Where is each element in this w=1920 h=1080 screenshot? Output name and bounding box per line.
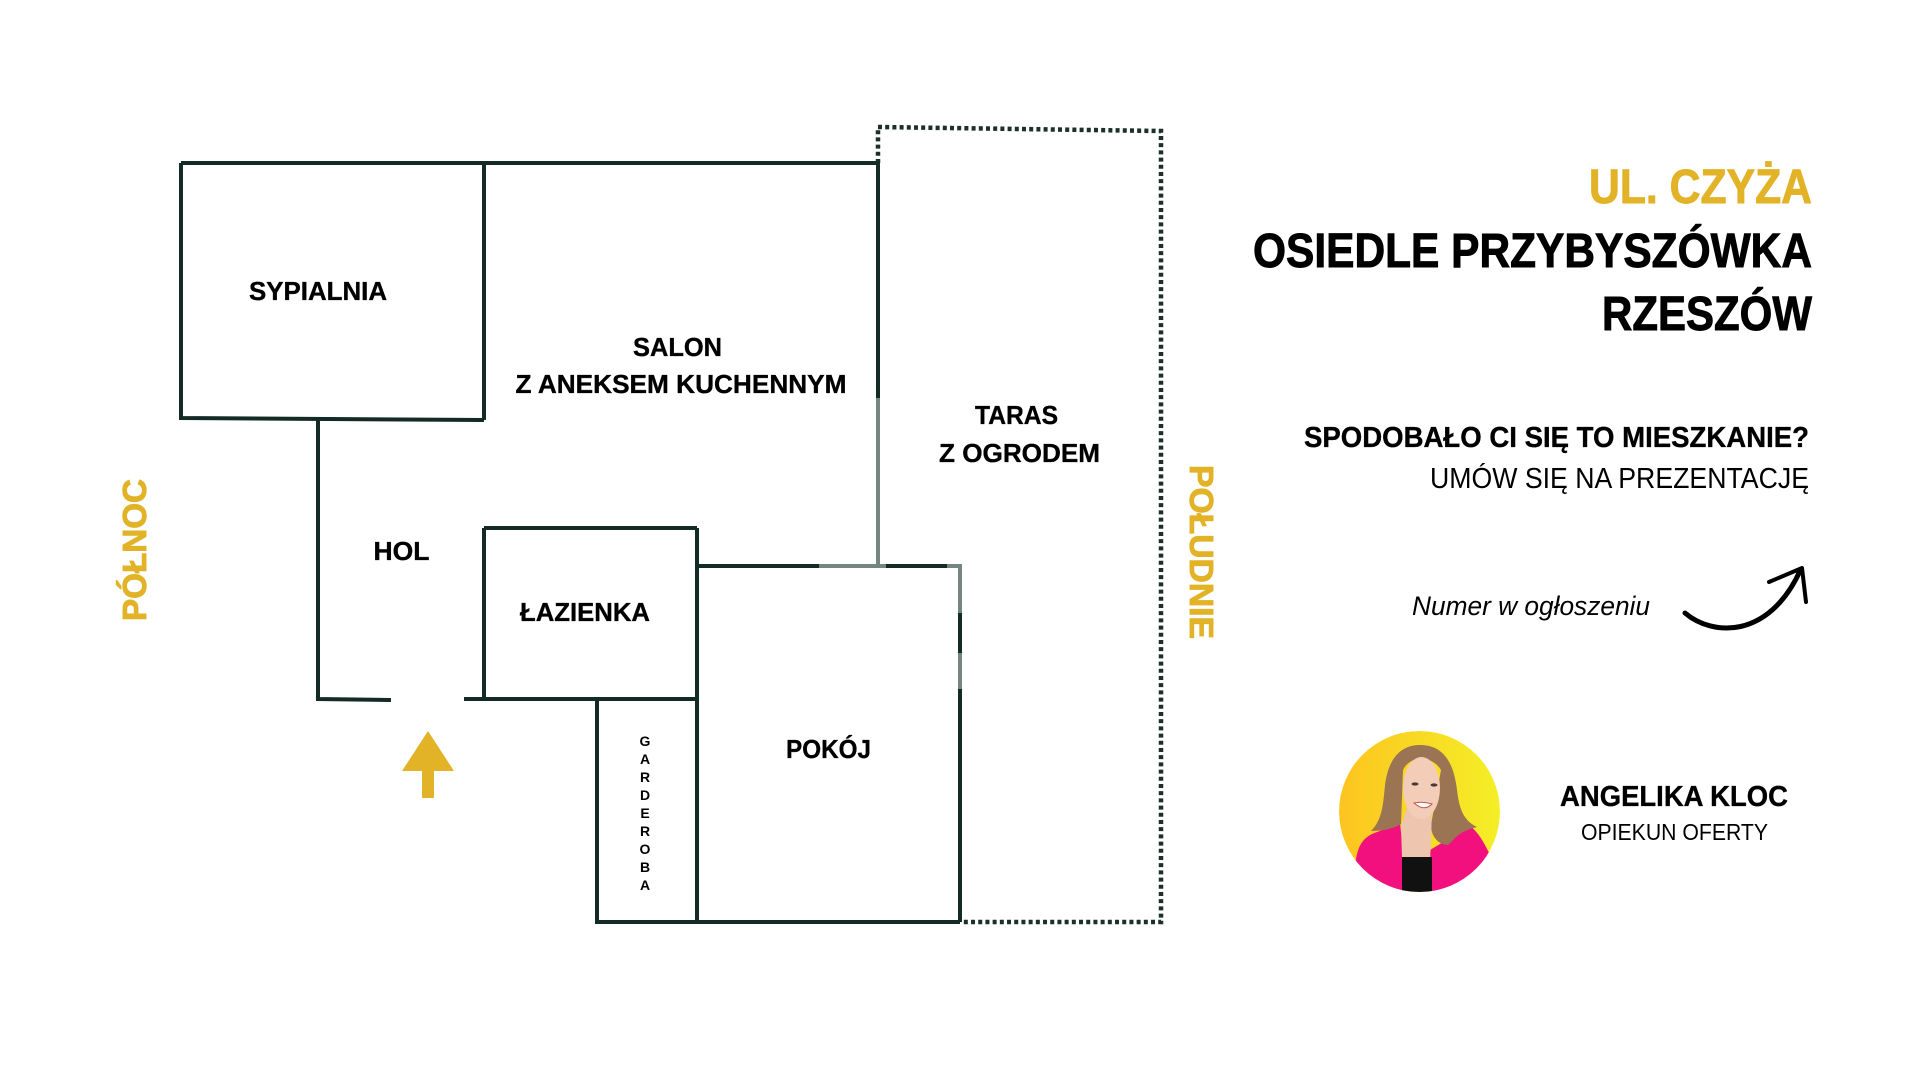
heading: district: OSIEDLE PRZYBYSZÓWKA [1253,223,1812,278]
room label: garderoba: G [640,733,651,749]
call to action: SPODOBAŁO CI SIĘ TO MIESZKANIE? [1304,422,1809,454]
room label: garderoba: B [640,859,650,875]
terrace dotted outline [878,127,1161,922]
call to action [1304,422,1809,495]
faded wall segments [819,398,960,689]
room label: garderoba: D [640,787,650,803]
room label: salon: Z ANEKSEM KUCHENNYM [516,369,846,399]
agent role: OPIEKUN OFERTY [1581,819,1768,845]
room label: hol: HOL [374,536,430,566]
room label: garderoba: A [640,751,650,767]
room label: garderoba: E [640,805,650,821]
room label: garderoba: R [640,769,650,785]
agent name: ANGELIKA KLOC [1560,781,1788,813]
room label: salon [516,332,846,399]
top [1402,857,1432,892]
walls [181,163,960,922]
heading: city: RZESZÓW [1602,286,1813,341]
neck and chest [1401,805,1432,857]
blazer [1356,824,1489,891]
heading: street: UL. CZYŻA [1589,161,1812,214]
call to action: UMÓW SIĘ NA PREZENTACJĘ [1430,462,1809,495]
agent photo [1339,731,1500,900]
room label: garderoba: A [640,877,650,893]
room label: taras: TARAS [975,400,1058,430]
room label: garderoba: O [640,841,651,857]
compass label: poludnie: POŁUDNIE [1183,465,1220,639]
room label: sypialnia: SYPIALNIA [249,276,387,306]
room label: garderoba [640,733,651,893]
features [1412,782,1438,808]
listing number note: Numer w ogłoszeniu [1412,591,1650,621]
face [1403,757,1440,819]
room label: taras: Z OGRODEM [939,438,1100,468]
room label: salon: SALON [633,332,722,362]
room label: garderoba: R [640,823,650,839]
room label: pokoj: POKÓJ [786,734,871,764]
room label: taras [939,400,1100,468]
hair [1371,745,1477,845]
floor plan [181,127,1161,922]
room label: lazienka: ŁAZIENKA [520,597,650,627]
icon: entrance arrow [402,731,454,798]
compass label: polnoc: PÓŁNOC [116,479,153,621]
icon: curved arrow [1685,568,1806,628]
